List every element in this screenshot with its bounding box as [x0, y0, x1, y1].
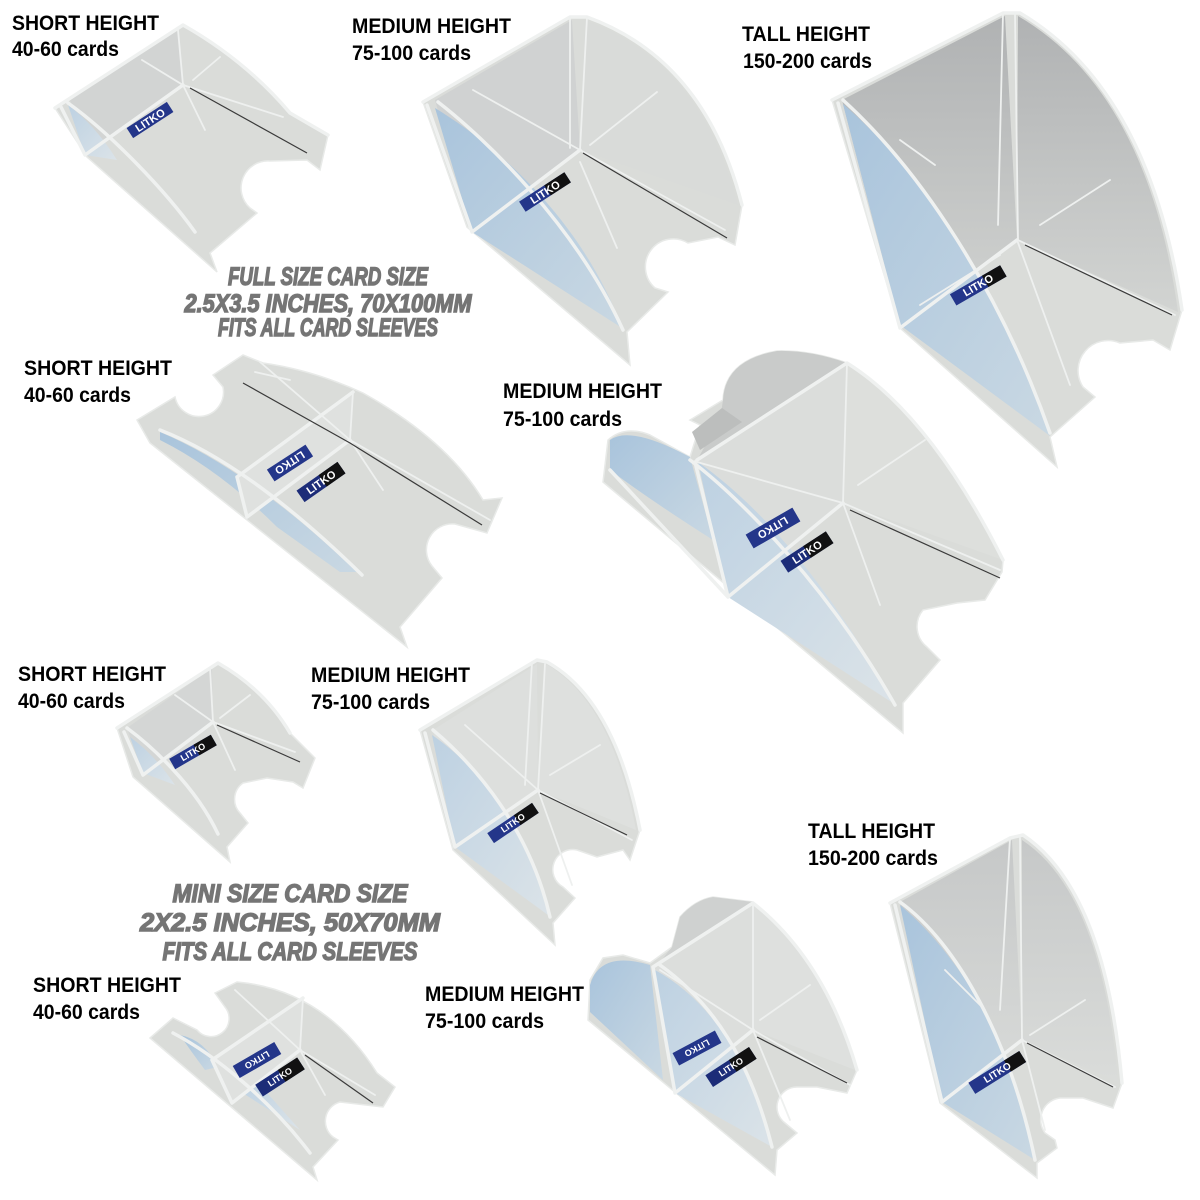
holder: mini medium height, closed: [420, 660, 640, 945]
size note: full size: FITS ALL CARD SLEEVES: [218, 314, 438, 342]
holder: mini short height, closed: [117, 663, 315, 862]
logo: LITKO: [499, 811, 527, 835]
logos: [673, 1031, 721, 1065]
logos: LITKO: [243, 1049, 271, 1071]
holder: mini medium height, open: LITKO: [717, 1055, 745, 1079]
label: short height 4: SHORT HEIGHT: [33, 974, 181, 997]
label: medium height 3: [311, 664, 470, 714]
holder: full size medium height, open: [603, 351, 1003, 733]
holder: full size medium height, open: LITKO: [790, 539, 825, 567]
label: tall height 1: TALL HEIGHT: [742, 23, 870, 46]
label: tall height 1: 150-200 cards: [743, 50, 872, 73]
label: medium height 4: [425, 983, 584, 1033]
label: short height 3: [18, 663, 166, 713]
holder: full size short height, open: LITKO: [305, 468, 339, 497]
holder: mini tall height, closed: [890, 835, 1122, 1178]
size note: mini size: 2X2.5 INCHES, 50X70MM: [139, 909, 441, 937]
holder: full size short height, closed: [55, 25, 328, 272]
label: short height 4: [33, 974, 181, 1024]
label: short height 2: SHORT HEIGHT: [24, 357, 172, 380]
label: short height 3: 40-60 cards: [18, 690, 125, 713]
size note: mini size: FITS ALL CARD SLEEVES: [162, 938, 418, 966]
logo: LITKO: [133, 107, 168, 135]
label: short height 3: SHORT HEIGHT: [18, 663, 166, 686]
logos: LITKO: [272, 448, 307, 476]
label: medium height 3: MEDIUM HEIGHT: [311, 664, 470, 687]
logo: [950, 265, 1007, 306]
label: tall height 2: 150-200 cards: [808, 847, 938, 870]
size note: mini size: MINI SIZE CARD SIZE: [172, 880, 409, 908]
logo: LITKO: [961, 272, 996, 299]
label: short height 2: 40-60 cards: [24, 384, 131, 407]
label: medium height 2: 75-100 cards: [503, 408, 622, 431]
label: medium height 1: [352, 15, 511, 65]
holder: mini medium height, open: [588, 897, 857, 1175]
label: medium height 2: [503, 380, 662, 431]
logo: [968, 1051, 1026, 1094]
label: short height 1: 40-60 cards: [12, 38, 119, 61]
label: medium height 3: 75-100 cards: [311, 691, 430, 714]
size note: mini size: [139, 880, 441, 966]
logos: [233, 1042, 281, 1078]
label: medium height 2: MEDIUM HEIGHT: [503, 380, 662, 403]
label: medium height 4: MEDIUM HEIGHT: [425, 983, 584, 1006]
logos: LITKO: [683, 1037, 711, 1059]
logos: LITKO: [755, 514, 790, 541]
logo: [127, 102, 174, 139]
label: short height 4: 40-60 cards: [33, 1001, 140, 1024]
holder: full size tall height, closed: [832, 13, 1182, 467]
size note: full size: 2.5X3.5 INCHES, 70X100MM: [184, 290, 473, 318]
label: medium height 1: 75-100 cards: [352, 42, 471, 65]
holder: full size medium height, closed: [423, 17, 742, 365]
label: tall height 2: [808, 820, 938, 870]
logo: LITKO: [179, 741, 207, 763]
logos: [267, 445, 313, 481]
holder: mini short height, open: [150, 982, 395, 1180]
label: short height 1: SHORT HEIGHT: [12, 12, 159, 35]
label: short height 2: [24, 357, 172, 407]
holder: full size short height, open: [137, 355, 502, 647]
logos: [746, 508, 800, 548]
logo: [169, 735, 217, 769]
label: medium height 1: MEDIUM HEIGHT: [352, 15, 511, 38]
holder: mini short height, open: LITKO: [266, 1065, 294, 1089]
logo: LITKO: [982, 1061, 1014, 1086]
logo: [487, 803, 539, 843]
size note: full size: [184, 263, 473, 342]
logo: LITKO: [528, 179, 563, 207]
size note: full size: FULL SIZE CARD SIZE: [228, 263, 429, 291]
label: tall height 1: [742, 23, 872, 73]
label: short height 1: [12, 12, 159, 61]
label: medium height 4: 75-100 cards: [425, 1010, 544, 1033]
logo: [519, 172, 571, 213]
label: tall height 2: TALL HEIGHT: [808, 820, 935, 843]
